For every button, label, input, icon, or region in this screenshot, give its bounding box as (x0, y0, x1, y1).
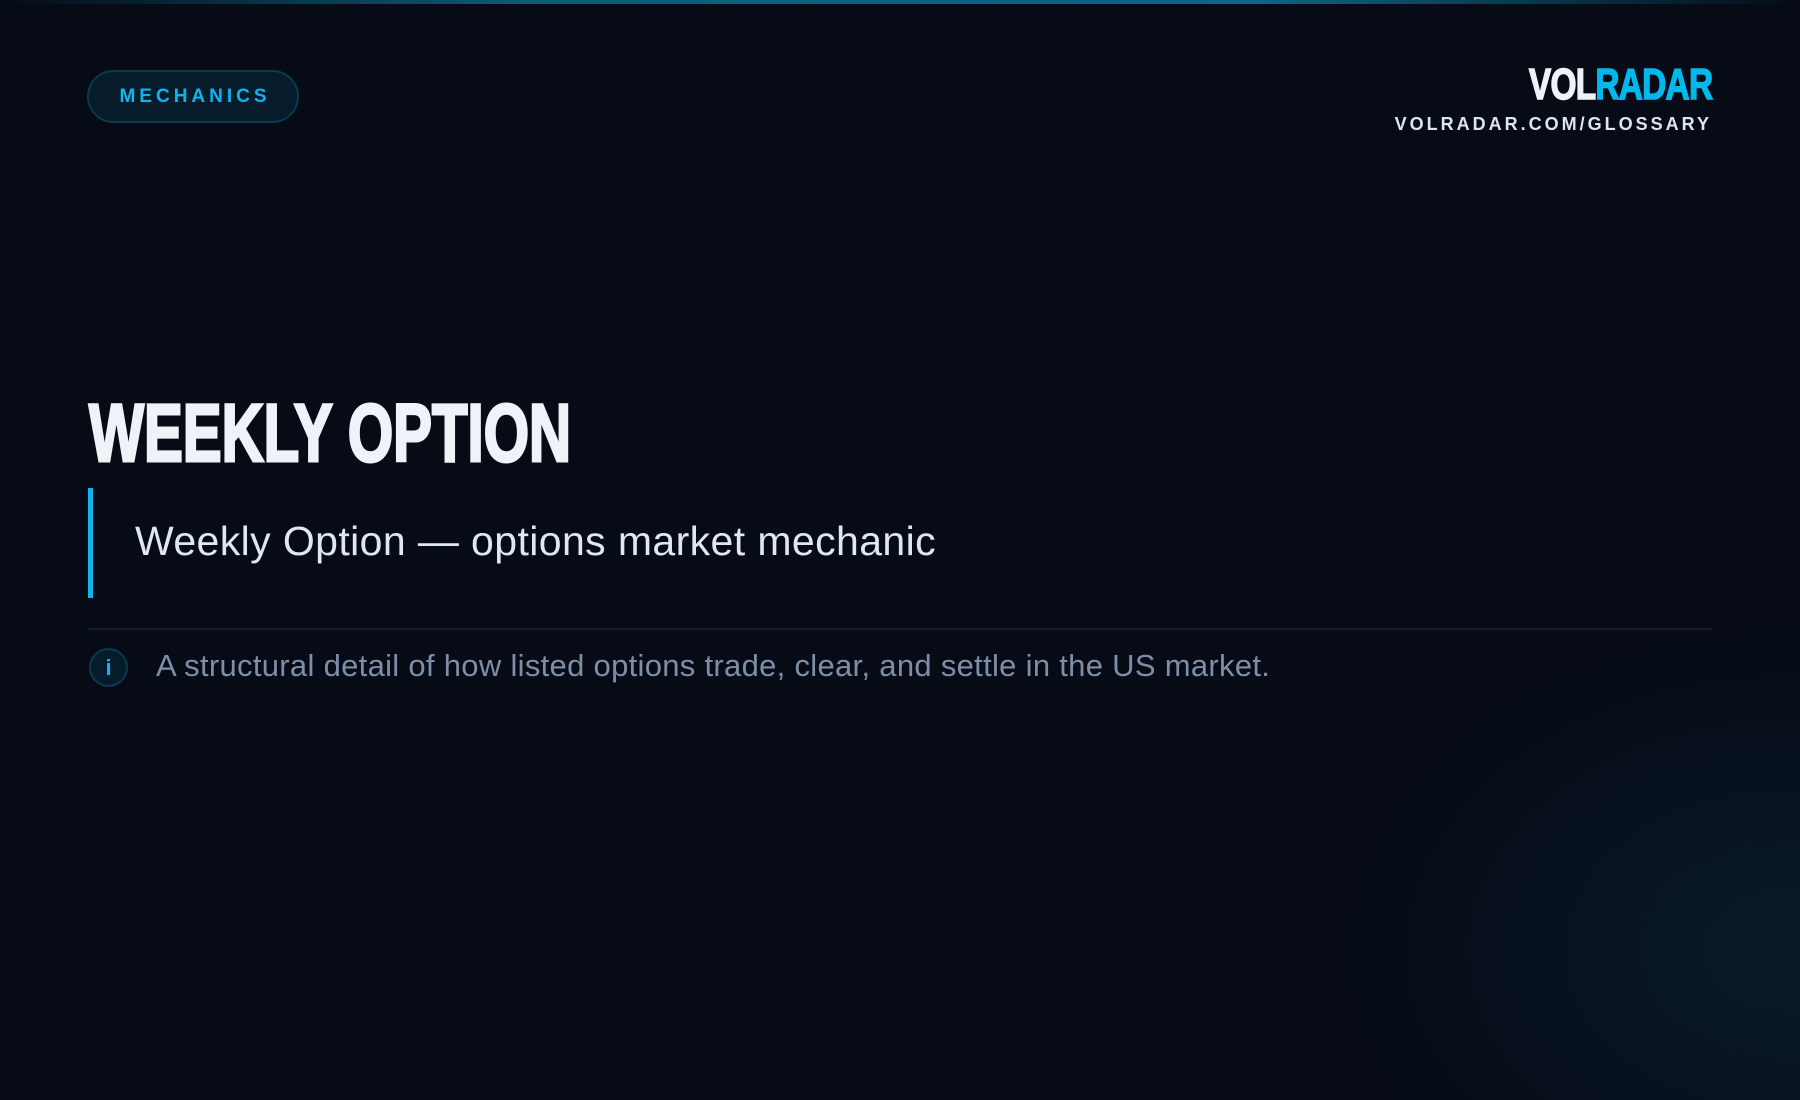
title: WEEKLY OPTION (89, 388, 571, 479)
icon: info (89, 648, 128, 687)
logo: VOLRADAR: VOLRADAR (1529, 60, 1712, 109)
icon: info: i (105, 655, 112, 680)
subtitle text: Weekly Option — options market mechanic (135, 518, 936, 564)
pill: category tag (87, 70, 299, 123)
pill: category tag: MECHANICS (119, 86, 271, 107)
description text: A structural detail of how listed options trade, clear, and settle in the US market. (156, 648, 1270, 683)
quote block: subtitle (88, 488, 1088, 598)
url text: VOLRADAR.COM/GLOSSARY (1395, 114, 1712, 134)
